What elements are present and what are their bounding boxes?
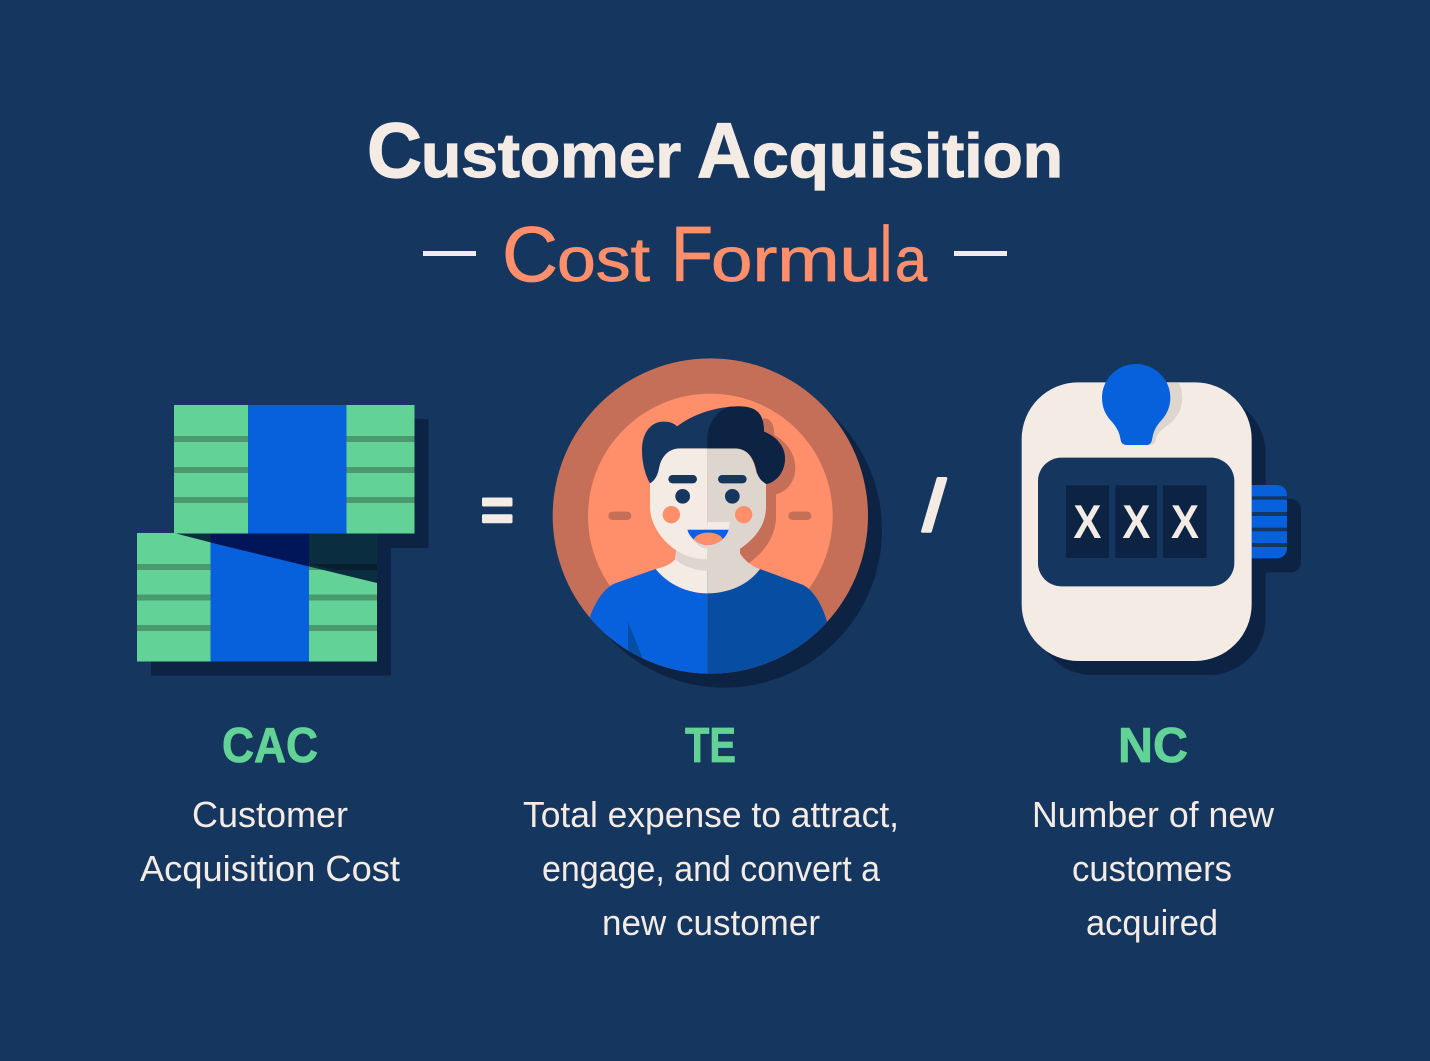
title line 2 (423, 210, 1007, 298)
division slash (921, 477, 947, 533)
title line 1 (367, 106, 1063, 194)
outer ring (553, 358, 868, 674)
shirt (587, 569, 828, 683)
digit reels (1066, 485, 1207, 558)
dial (1252, 485, 1287, 558)
title (367, 106, 1063, 298)
CAC heading: CAC (222, 719, 318, 773)
NC heading: NC (1118, 719, 1188, 773)
NC description: acquired (1086, 902, 1218, 943)
label: CAC (140, 719, 400, 889)
button (1102, 364, 1170, 445)
title line 2: a (895, 226, 927, 295)
TE heading: TE (685, 719, 736, 773)
title line 1: ustomer (421, 122, 681, 191)
CAC description: Acquisition Cost (140, 848, 400, 889)
mouth (687, 530, 728, 548)
TE description: Total expense to attract, (523, 794, 899, 835)
counter shadow (1036, 396, 1301, 675)
CAC description: Customer (192, 794, 348, 835)
TE description: new customer (602, 902, 820, 943)
TE description: engage, and convert a (542, 848, 881, 889)
icon: customer portrait (553, 358, 882, 688)
label: NC (1032, 719, 1275, 943)
NC description: customers (1072, 848, 1232, 889)
counter body (1022, 382, 1252, 661)
title line 1: A (697, 106, 751, 194)
digit reels: X (1122, 496, 1151, 549)
side dashes (608, 512, 811, 520)
eyes (675, 489, 740, 504)
CAC description (140, 794, 400, 889)
title line 2: F (671, 210, 713, 298)
inner circle (588, 394, 833, 638)
title line 2: l (880, 210, 892, 298)
shadow (151, 419, 428, 676)
TE description (523, 794, 899, 943)
display window (1038, 458, 1234, 586)
head shadow (727, 418, 795, 577)
icon: stacks of money (137, 405, 428, 676)
chin shadow (675, 547, 707, 571)
lower bill (137, 533, 377, 662)
cheeks (663, 506, 752, 523)
equals sign (482, 498, 512, 523)
upper bill (174, 405, 414, 534)
title line 1: C (367, 106, 422, 194)
icon: tally counter (1022, 364, 1301, 675)
title line 2: ormu (711, 226, 881, 295)
eyebrows (668, 475, 747, 483)
NC description (1032, 794, 1275, 943)
nose shading (707, 448, 740, 559)
digit reels: X (1073, 496, 1102, 549)
digit reels: X (1171, 496, 1199, 549)
portrait shadow (567, 372, 882, 688)
label: TE (523, 719, 899, 943)
face (650, 448, 708, 560)
neck (656, 550, 708, 594)
title line 1: cquisition (752, 122, 1063, 191)
button shadow (1148, 382, 1182, 445)
title line 2: ost (557, 226, 650, 295)
title line 2: C (502, 210, 558, 298)
hair (642, 406, 785, 484)
NC description: Number of new (1032, 794, 1275, 835)
